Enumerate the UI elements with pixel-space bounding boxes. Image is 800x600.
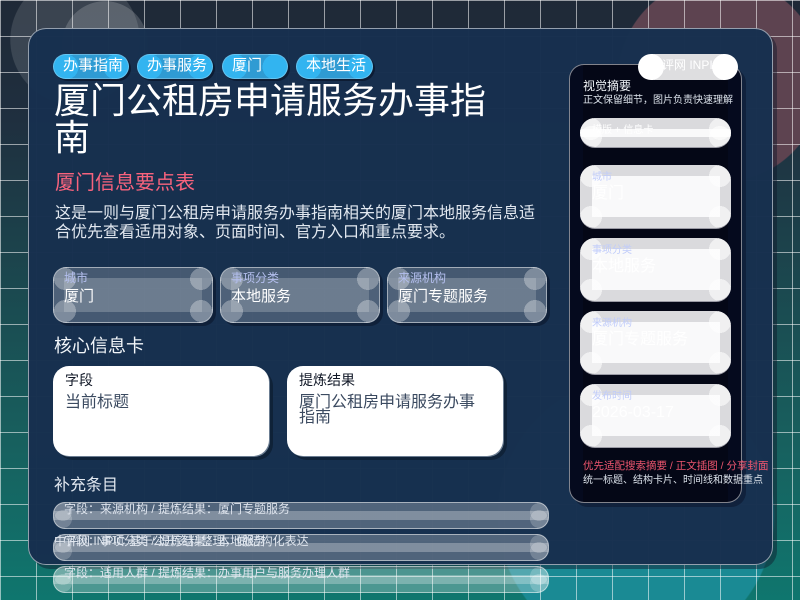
meta card: 事项分类: 事项分类 <box>231 271 279 285</box>
list row: 来源机构: 字段：来源机构 / 提炼结果：厦门专题服务 <box>64 502 290 516</box>
meta card: 来源机构: 来源机构 <box>398 271 446 285</box>
tag: 厦门: 厦门 <box>232 57 262 74</box>
meta card: 事项分类: 本地服务 <box>231 288 291 305</box>
tag: 本地生活 <box>296 54 373 79</box>
meta card: 事项分类 <box>220 267 380 323</box>
sidebar card: 发布时间: 发布时间 <box>592 391 632 402</box>
title: 厦门公租房申请服务办事指南 <box>54 80 486 158</box>
list row: 来源机构 <box>53 502 549 529</box>
sidebar card: 来源机构 <box>580 311 731 375</box>
sidebar card: 事项分类: 事项分类 <box>592 245 632 256</box>
meta card: 来源机构: 厦门专题服务 <box>398 288 488 305</box>
sidebar card: 城市: 城市 <box>592 172 612 183</box>
info card: 提炼结果: 厦门公租房申请服务办事指南 <box>299 394 475 426</box>
sidebar card: 事项分类 <box>580 238 731 302</box>
sidebar subheading: 正文保留细节，图片负责快速理解 <box>583 95 733 106</box>
tag: 本地生活: 本地生活 <box>306 57 366 74</box>
tag: 办事服务: 办事服务 <box>147 57 207 74</box>
meta card: 城市: 城市 <box>64 271 88 285</box>
tag: 办事指南 <box>53 54 129 79</box>
tag: 办事服务 <box>137 54 213 79</box>
list row: 适用人群: 字段：适用人群 / 提炼结果：办事用户与服务办理人群 <box>64 566 350 580</box>
info card: 字段 <box>53 366 269 456</box>
sidebar card: 来源机构: 来源机构 <box>592 318 632 329</box>
sidebar card: 事项分类: 本地服务 <box>592 258 656 275</box>
info card: 提炼结果 <box>287 366 503 456</box>
info card: 字段: 当前标题 <box>65 394 129 411</box>
tag: 办事指南: 办事指南 <box>63 57 123 74</box>
list row: 事项分类 <box>53 534 549 561</box>
sidebar card: 发布时间: 2026-03-17 <box>592 404 674 421</box>
info card: 提炼结果: 提炼结果 <box>299 372 355 388</box>
sidebar banner card <box>580 118 731 148</box>
source pill: 中评网 INPIC <box>650 58 721 72</box>
sidebar usage line: 优先适配搜索摘要 / 正文插图 / 分享封面 <box>583 460 769 472</box>
info card: 字段: 字段 <box>65 372 93 388</box>
tag: 厦门 <box>222 54 288 79</box>
sidebar banner card: 模版 + 信息卡 <box>592 125 653 136</box>
sidebar card: 城市: 厦门 <box>592 185 624 202</box>
source pill <box>638 54 738 80</box>
sidebar panel <box>569 64 742 503</box>
meta card: 城市: 厦门 <box>64 288 94 305</box>
list row: 事项分类: 字段：事项分类 / 提炼结果：本地服务 <box>64 534 266 548</box>
meta card: 来源机构 <box>387 267 547 323</box>
footer source note: 中评网 INPIC 基于公开资料整理，做结构化表达 <box>54 534 309 548</box>
heading: 核心信息卡: 核心信息卡 <box>54 336 144 356</box>
heading: 补充条目: 补充条目 <box>54 477 118 494</box>
list row: 适用人群 <box>53 566 549 593</box>
sidebar card: 来源机构: 厦门专题服务 <box>592 331 688 348</box>
sidebar note: 统一标题、结构卡片、时间线和数据重点 <box>583 475 763 486</box>
intro paragraph: 这是一则与厦门公租房申请服务办事指南相关的厦门本地服务信息适合优先查看适用对象、页面时间、官方入口和重点要求。 <box>55 205 535 241</box>
sidebar heading: 视觉摘要 <box>583 79 631 93</box>
meta card: 城市 <box>53 267 213 323</box>
sidebar card: 城市 <box>580 165 731 229</box>
subtitle: 厦门信息要点表 <box>55 172 195 194</box>
sidebar card: 发布时间 <box>580 384 731 448</box>
